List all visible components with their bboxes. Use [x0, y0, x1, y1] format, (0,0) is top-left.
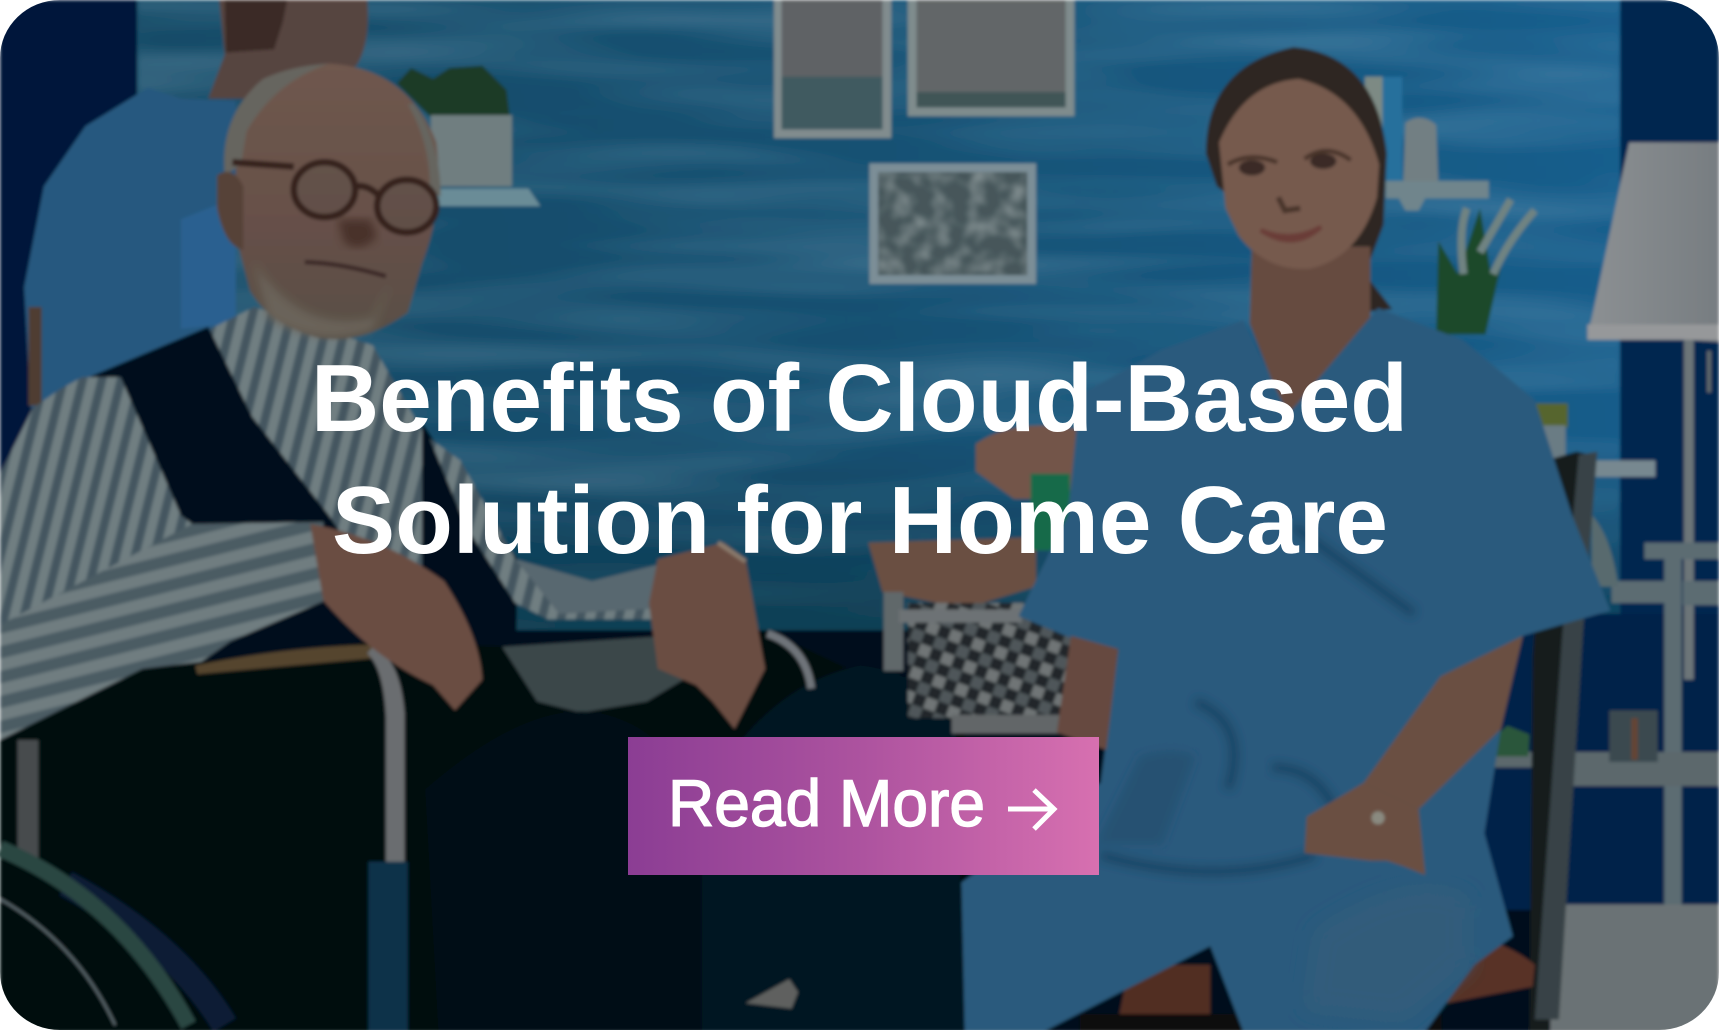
title — [311, 345, 1408, 574]
black vest — [90, 326, 519, 653]
background patient with walker — [868, 425, 1080, 733]
read more button — [628, 737, 1099, 875]
neck — [1250, 247, 1370, 422]
hair — [1206, 47, 1392, 312]
title: Solution for Home Care — [332, 467, 1388, 574]
shirt collar and chest — [207, 306, 426, 566]
nurse — [961, 47, 1610, 1032]
old man — [0, 64, 965, 1032]
head — [217, 64, 441, 339]
background nurse — [24, 0, 368, 408]
scrubs — [961, 308, 1610, 1032]
shirt sleeves — [0, 373, 195, 625]
icon: right arrow — [1008, 790, 1054, 829]
left shelf with plant — [397, 66, 540, 206]
trousers and wheelchair — [0, 630, 965, 1032]
wall frames — [774, 0, 1074, 284]
title: Benefits of Cloud-Based — [311, 345, 1408, 452]
chair with orange seat — [1080, 452, 1597, 1032]
glasses — [232, 162, 436, 232]
hands — [310, 524, 482, 710]
face — [1219, 79, 1379, 269]
arms and hand — [1057, 636, 1118, 750]
button label: Read More — [668, 766, 985, 840]
right side decor: shelf, bottle, plant, lamp and shelving — [1365, 77, 1719, 1032]
